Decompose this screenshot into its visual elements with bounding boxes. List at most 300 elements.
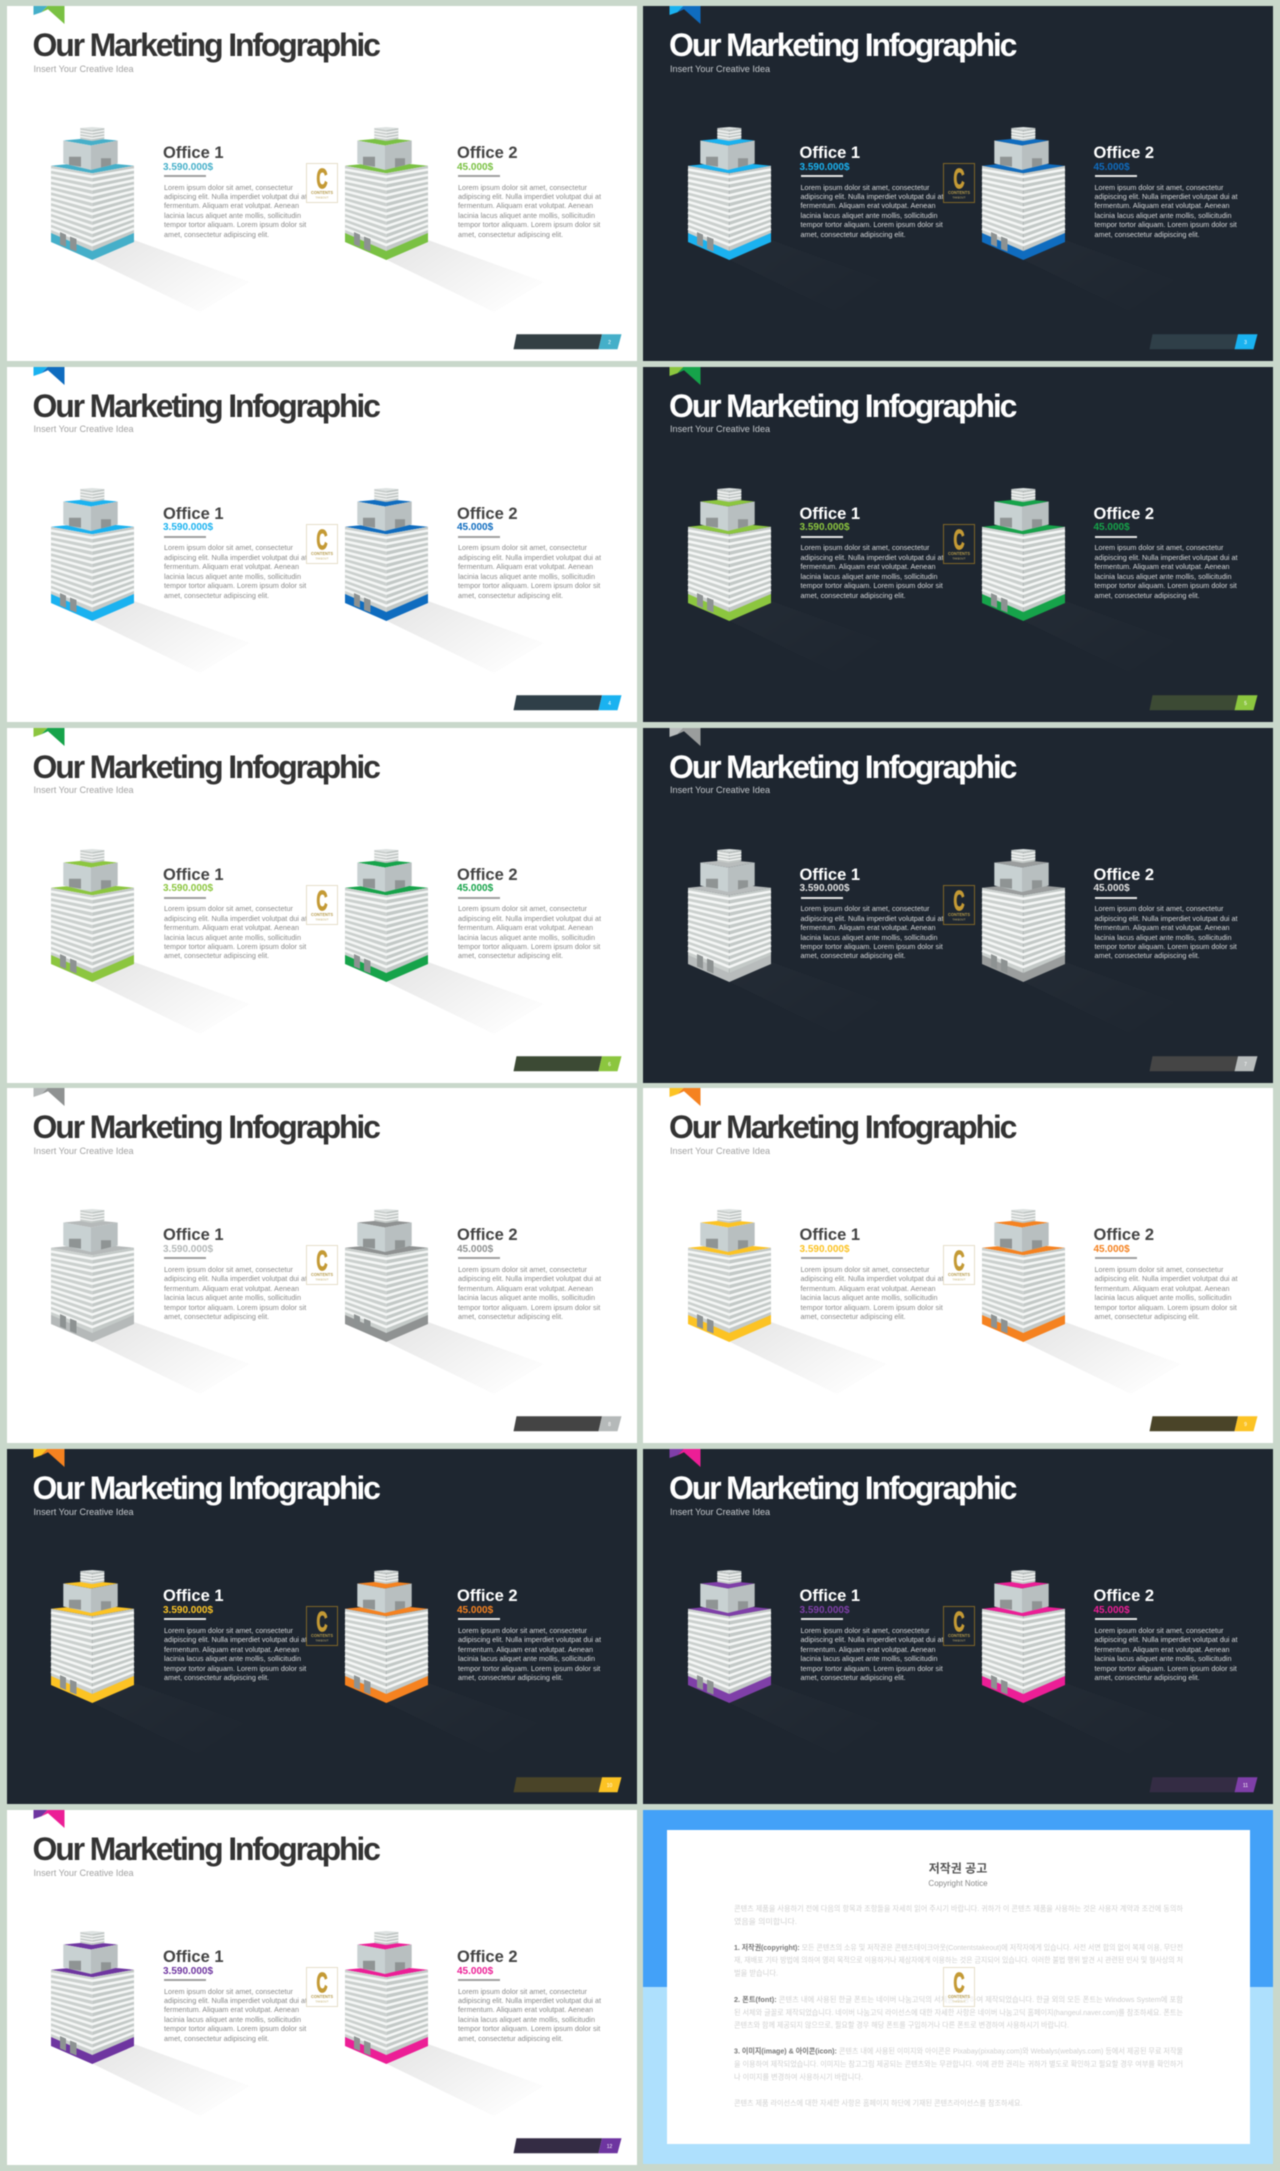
body text: fermentum. Aliquam erat volutpat. Aenean: [458, 923, 593, 932]
body text: tempor tortor aliquam. Lorem ipsum dolor sit: [800, 942, 943, 951]
icon: building office 1: [682, 1563, 776, 1708]
body text: adipiscing elit. Nulla imperdiet volutpat dui at: [1094, 914, 1238, 923]
body text: amet, consectetur adipiscing elit.: [458, 1312, 563, 1321]
text block: office 1: [800, 1226, 970, 1331]
body text: amet, consectetur adipiscing elit.: [1094, 951, 1200, 960]
body text: amet, consectetur adipiscing elit.: [800, 591, 906, 600]
section 3 image and icon: [734, 2046, 1183, 2082]
icon: building office 2: [344, 488, 506, 658]
body text: tempor tortor aliquam. Lorem ipsum dolor sit: [164, 1303, 306, 1312]
body text: fermentum. Aliquam erat volutpat. Aenean: [458, 562, 593, 571]
body text: tempor tortor aliquam. Lorem ipsum dolor sit: [1094, 581, 1237, 590]
body text: [1094, 904, 1238, 961]
body text: Lorem ipsum dolor sit amet, consectetur: [800, 543, 929, 552]
office value: 45.000$: [457, 1966, 493, 1976]
text block: office 2: [1094, 1587, 1264, 1692]
body text: [164, 536, 307, 600]
notice heading: 저작권 공고: [928, 1860, 987, 1876]
icon: building office 1: [50, 848, 212, 1019]
body text: lacinia lacus aliquet ante mollis, sollicitudin: [164, 1654, 301, 1663]
body text: adipiscing elit. Nulla imperdiet volutpat dui at: [1094, 1635, 1238, 1644]
panel: slide 3 sky and blue, dark: [643, 6, 1273, 361]
section 3 image and icon: 을 이용하여 제작되었습니다. 이미지는 참고그림 제공되는 콘텐츠와는 무관합니다. 이에 관한 권리는 귀하가 별도로 확인하고 필요할 경우 여부를 확인하거: [734, 2058, 1183, 2068]
page number bar: [510, 1775, 626, 1795]
body text: [1094, 174, 1238, 240]
office name: Office 1: [800, 866, 860, 884]
panel: copyright notice slide: [643, 1810, 1273, 2164]
icon: building office 2: [976, 1563, 1070, 1708]
body text: lacinia lacus aliquet ante mollis, sollicitudin: [800, 572, 938, 581]
title: Our Marketing Infographic: [32, 749, 379, 785]
text block: office 1: [163, 1226, 333, 1331]
body text: lacinia lacus aliquet ante mollis, sollicitudin: [164, 211, 301, 220]
icon: ribbon bookmark: [6, 1449, 76, 1473]
icon: contents logo badge: [306, 1967, 338, 2007]
text block: office 2: [457, 866, 627, 971]
office name: Office 2: [1094, 1226, 1154, 1244]
office name: Office 1: [800, 1587, 860, 1605]
title: Our Marketing Infographic: [669, 1109, 1015, 1145]
body text: [458, 1626, 601, 1682]
icon: building office 2: [981, 126, 1066, 260]
body text: Lorem ipsum dolor sit amet, consectetur: [1094, 543, 1223, 552]
page number bar: 3: [1244, 340, 1247, 346]
body text: [1094, 1626, 1238, 1682]
page number bar: 6: [608, 1062, 611, 1068]
office name: Office 1: [800, 505, 860, 523]
body text: lacinia lacus aliquet ante mollis, sollicitudin: [1094, 211, 1232, 220]
subtitle: Insert Your Creative Idea: [670, 785, 770, 795]
body text: fermentum. Aliquam erat volutpat. Aenean: [458, 201, 593, 210]
body text: amet, consectetur adipiscing elit.: [458, 230, 563, 239]
body text: Lorem ipsum dolor sit amet, consectetur: [164, 1265, 293, 1274]
office value: 3.590.000$: [800, 1605, 850, 1616]
icon: ribbon bookmark: [32, 366, 66, 386]
body text: amet, consectetur adipiscing elit.: [1094, 230, 1200, 239]
office name: Office 1: [163, 1226, 224, 1244]
intro paragraph: 였음을 의미합니다.: [734, 1916, 796, 1926]
body text: tempor tortor aliquam. Lorem ipsum dolor sit: [800, 1664, 943, 1673]
page number bar: [510, 2136, 626, 2156]
office value: 3.590.000$: [163, 1966, 213, 1976]
office value: 45.000$: [1094, 522, 1130, 533]
body text: fermentum. Aliquam erat volutpat. Aenean: [164, 562, 299, 571]
body text: amet, consectetur adipiscing elit.: [164, 230, 269, 239]
icon: building office 2: [344, 126, 506, 297]
body text: [164, 174, 307, 239]
text block: office 1: [162, 505, 307, 600]
icon: contents logo badge: [942, 162, 976, 204]
body text: adipiscing elit. Nulla imperdiet volutpat dui at: [1094, 192, 1238, 201]
body text: Lorem ipsum dolor sit amet, consectetur: [164, 904, 293, 913]
intro paragraph: [734, 1903, 1183, 1926]
body text: [458, 904, 601, 961]
body text: amet, consectetur adipiscing elit.: [164, 1673, 269, 1682]
text block: office 1: [162, 866, 307, 960]
body text: amet, consectetur adipiscing elit.: [800, 1312, 906, 1321]
body text: fermentum. Aliquam erat volutpat. Aenean: [1094, 1645, 1230, 1654]
body text: fermentum. Aliquam erat volutpat. Aenean: [458, 1284, 593, 1293]
office name: Office 2: [1094, 1587, 1154, 1605]
body text: [164, 1265, 307, 1322]
subtitle: Insert Your Creative Idea: [34, 1507, 134, 1517]
office value: 3.590.000$: [800, 883, 850, 894]
body text: adipiscing elit. Nulla imperdiet volutpat dui at: [458, 914, 601, 923]
office name: Office 2: [457, 1948, 518, 1966]
panel: slide 11 purple and pink, dark: [643, 1449, 1273, 1804]
body text: tempor tortor aliquam. Lorem ipsum dolor sit: [1094, 220, 1237, 229]
body text: Lorem ipsum dolor sit amet, consectetur: [164, 182, 293, 192]
body text: [800, 1626, 944, 1682]
body text: tempor tortor aliquam. Lorem ipsum dolor sit: [164, 942, 306, 951]
body text: lacinia lacus aliquet ante mollis, sollicitudin: [800, 1293, 938, 1302]
office name: Office 2: [457, 505, 518, 523]
body text: Lorem ipsum dolor sit amet, consectetur: [164, 543, 293, 552]
body text: fermentum. Aliquam erat volutpat. Aenean: [1094, 1284, 1230, 1293]
body text: fermentum. Aliquam erat volutpat. Aenean: [800, 201, 936, 210]
page number bar: [1147, 1775, 1262, 1795]
body text: Lorem ipsum dolor sit amet, consectetur: [800, 1265, 929, 1274]
icon: ribbon bookmark: [642, 1449, 712, 1473]
notice card: [666, 1830, 1250, 2144]
section 3 image and icon: 3. 이미지(image) & 아이콘(icon): 콘텐츠 내에 사용된 이미지와 아이콘은 Pixabay(pixabay.com)와 Webalys(webalys.com) 등에서 제공된 무료 저작물: [734, 2046, 1183, 2056]
body text: tempor tortor aliquam. Lorem ipsum dolor sit: [164, 1664, 306, 1673]
section 2 font: 콘텐츠와 함께 제공되지 않으므로, 필요할 경우 해당 폰트를 구입하거나 다른 폰트로 변경하여 사용하시기 바랍니다.: [734, 2020, 1068, 2030]
body text: [800, 174, 944, 240]
page number bar: [512, 694, 622, 712]
title: Our Marketing Infographic: [669, 1470, 1015, 1506]
body text: fermentum. Aliquam erat volutpat. Aenean: [800, 923, 936, 932]
icon: ribbon bookmark: [668, 366, 702, 386]
panel: slide 7 gray, dark: [643, 728, 1273, 1083]
page number bar: 8: [608, 1422, 611, 1428]
office name: Office 1: [163, 1948, 224, 1966]
title: Our Marketing Infographic: [669, 388, 1015, 424]
body text: amet, consectetur adipiscing elit.: [1094, 1673, 1200, 1682]
text block: office 2: [456, 144, 602, 239]
body text: fermentum. Aliquam erat volutpat. Aenean: [800, 1645, 936, 1654]
body text: tempor tortor aliquam. Lorem ipsum dolor sit: [164, 2024, 306, 2033]
icon: contents logo badge: [306, 1245, 338, 1285]
body text: lacinia lacus aliquet ante mollis, sollicitudin: [164, 1293, 301, 1302]
subtitle: Insert Your Creative Idea: [34, 785, 134, 795]
body text: [800, 1265, 944, 1322]
subtitle: Insert Your Creative Idea: [670, 1146, 770, 1156]
text block: office 1: [163, 1587, 333, 1692]
page number bar: 10: [606, 1783, 612, 1789]
page number bar: [510, 1414, 626, 1434]
section 3 image and icon: 나 이미지를 변경하여 사용하시기 바랍니다.: [734, 2072, 862, 2082]
text block: office 1: [799, 505, 944, 600]
body text: Lorem ipsum dolor sit amet, consectetur: [800, 182, 929, 192]
office name: Office 2: [457, 866, 518, 884]
body text: adipiscing elit. Nulla imperdiet volutpat dui at: [164, 914, 307, 923]
body text: tempor tortor aliquam. Lorem ipsum dolor sit: [458, 220, 600, 229]
subtitle: Insert Your Creative Idea: [34, 1868, 134, 1878]
body text: tempor tortor aliquam. Lorem ipsum dolor sit: [458, 1303, 600, 1312]
panel: slide 10 yellow and orange, dark: [6, 1449, 636, 1804]
page number bar: 11: [1243, 1783, 1248, 1789]
body text: [164, 1986, 307, 2043]
icon: building office 2: [981, 487, 1066, 622]
body text: amet, consectetur adipiscing elit.: [164, 591, 269, 600]
office name: Office 1: [163, 1587, 224, 1605]
body text: fermentum. Aliquam erat volutpat. Aenean: [458, 1645, 593, 1654]
body text: Lorem ipsum dolor sit amet, consectetur: [458, 1986, 587, 1996]
body text: [164, 1626, 307, 1682]
body text: adipiscing elit. Nulla imperdiet volutpat dui at: [458, 192, 601, 201]
body text: amet, consectetur adipiscing elit.: [800, 1673, 906, 1682]
text block: office 2: [1094, 866, 1264, 971]
body text: amet, consectetur adipiscing elit.: [458, 951, 563, 960]
subtitle: Insert Your Creative Idea: [670, 1507, 770, 1517]
icon: ribbon bookmark: [32, 727, 66, 746]
body text: adipiscing elit. Nulla imperdiet volutpat dui at: [800, 1635, 944, 1644]
icon: contents logo badge: [306, 885, 338, 925]
body text: tempor tortor aliquam. Lorem ipsum dolor sit: [800, 1303, 943, 1312]
office value: 3.590.000$: [800, 522, 850, 533]
body text: fermentum. Aliquam erat volutpat. Aenean: [1094, 562, 1230, 571]
office value: 45.000$: [457, 1605, 493, 1616]
icon: building office 1: [45, 1202, 140, 1347]
office value: 45.000$: [457, 883, 493, 894]
icon: ribbon bookmark: [6, 1810, 76, 1834]
title: Our Marketing Infographic: [32, 1109, 379, 1145]
icon: contents logo badge: [942, 1606, 974, 1646]
icon: building office 1: [682, 842, 776, 987]
body text: lacinia lacus aliquet ante mollis, sollicitudin: [800, 932, 938, 942]
office value: 3.590.000$: [163, 162, 213, 172]
office value: 3.590.000$: [163, 522, 213, 533]
body text: [458, 536, 602, 600]
body text: Lorem ipsum dolor sit amet, consectetur: [458, 904, 587, 913]
office name: Office 2: [1094, 144, 1154, 162]
page number bar: [512, 333, 622, 350]
section 2 font: 된 서체와 글꼴로 제작되었습니다. 네이버 나눔고딕 라이선스에 대한 자세한 사항은 네이버 나눔고딕 홈페이지(hangeul.naver.com)를 참조하세요. 폰트는: [734, 2007, 1183, 2017]
section 1 copyright: 재, 재배포 기타 방법에 의하여 영리 목적으로 이용하거나 제삼자에게 이용하는 것은 금지되어 있습니다. 이러한 불법 행위 발견 시 관련된 민사 및 형사상의 처: [734, 1954, 1183, 1964]
page number bar: 12: [606, 2144, 612, 2150]
body text: lacinia lacus aliquet ante mollis, sollicitudin: [1094, 572, 1232, 581]
office value: 45.000$: [457, 522, 493, 533]
body text: lacinia lacus aliquet ante mollis, sollicitudin: [458, 1654, 595, 1663]
body text: amet, consectetur adipiscing elit.: [164, 1312, 269, 1321]
office name: Office 1: [800, 1226, 860, 1244]
body text: lacinia lacus aliquet ante mollis, sollicitudin: [1094, 932, 1232, 942]
body text: fermentum. Aliquam erat volutpat. Aenean: [1094, 201, 1230, 210]
title: Our Marketing Infographic: [32, 1831, 379, 1867]
icon: building office 1: [45, 1924, 140, 2069]
body text: Lorem ipsum dolor sit amet, consectetur: [800, 904, 929, 913]
office value: 3.590.000$: [163, 1244, 213, 1255]
body text: tempor tortor aliquam. Lorem ipsum dolor sit: [1094, 1303, 1237, 1312]
icon: building office 1: [682, 1202, 776, 1347]
body text: amet, consectetur adipiscing elit.: [458, 591, 563, 600]
blue top band: [643, 1810, 1273, 1987]
body text: lacinia lacus aliquet ante mollis, sollicitudin: [458, 211, 595, 220]
icon: building office 2: [339, 1563, 434, 1708]
page number bar: [1150, 334, 1258, 350]
subtitle: Insert Your Creative Idea: [34, 424, 134, 434]
body text: fermentum. Aliquam erat volutpat. Aenean: [164, 201, 299, 210]
body text: tempor tortor aliquam. Lorem ipsum dolor sit: [800, 581, 943, 590]
body text: lacinia lacus aliquet ante mollis, sollicitudin: [800, 1654, 938, 1663]
body text: adipiscing elit. Nulla imperdiet volutpat dui at: [164, 1635, 307, 1644]
text block: office 2: [1094, 1226, 1264, 1331]
body text: adipiscing elit. Nulla imperdiet volutpat dui at: [458, 1996, 601, 2005]
subtitle: Insert Your Creative Idea: [34, 1146, 134, 1156]
text block: office 2: [456, 505, 602, 600]
body text: adipiscing elit. Nulla imperdiet volutpat dui at: [164, 1996, 307, 2005]
body text: amet, consectetur adipiscing elit.: [1094, 1312, 1200, 1321]
office name: Office 1: [163, 866, 224, 884]
icon: contents logo badge: [942, 1967, 974, 2007]
text block: office 2: [457, 1948, 627, 2053]
icon: contents logo badge: [306, 1606, 338, 1646]
body text: Lorem ipsum dolor sit amet, consectetur: [1094, 904, 1223, 913]
panel: slide 9 yellow and orange, light: [643, 1088, 1273, 1443]
office value: 45.000$: [457, 1244, 493, 1255]
page number bar: 2: [608, 340, 611, 346]
body text: fermentum. Aliquam erat volutpat. Aenean: [800, 1284, 936, 1293]
section 1 copyright: 벌을 받습니다.: [734, 1968, 778, 1978]
body text: amet, consectetur adipiscing elit.: [800, 951, 906, 960]
body text: adipiscing elit. Nulla imperdiet volutpat dui at: [458, 1274, 601, 1283]
text block: office 2: [1093, 144, 1238, 240]
text block: office 2: [1093, 505, 1238, 600]
body text: fermentum. Aliquam erat volutpat. Aenean: [1094, 923, 1230, 932]
subtitle: Insert Your Creative Idea: [670, 64, 770, 74]
text block: office 2: [457, 1587, 627, 1692]
office value: 45.000$: [1094, 1244, 1130, 1255]
page number bar: [1147, 1054, 1262, 1074]
body text: [1094, 1265, 1238, 1322]
title: Our Marketing Infographic: [669, 749, 1015, 785]
icon: building office 2: [339, 1202, 434, 1347]
body text: lacinia lacus aliquet ante mollis, sollicitudin: [1094, 1293, 1232, 1302]
body text: lacinia lacus aliquet ante mollis, sollicitudin: [1094, 1654, 1232, 1663]
panel: slide 8 gray, light: [6, 1088, 636, 1443]
office name: Office 2: [457, 1587, 518, 1605]
icon: contents logo badge: [306, 162, 338, 204]
body text: Lorem ipsum dolor sit amet, consectetur: [458, 1626, 587, 1635]
body text: amet, consectetur adipiscing elit.: [800, 230, 906, 239]
body text: lacinia lacus aliquet ante mollis, sollicitudin: [458, 932, 595, 942]
body text: Lorem ipsum dolor sit amet, consectetur: [1094, 1626, 1223, 1635]
body text: fermentum. Aliquam erat volutpat. Aenean: [800, 562, 936, 571]
body text: lacinia lacus aliquet ante mollis, sollicitudin: [458, 1293, 595, 1302]
text block: office 1: [800, 1587, 970, 1692]
office name: Office 2: [457, 144, 518, 162]
body text: Lorem ipsum dolor sit amet, consectetur: [1094, 1265, 1223, 1274]
office value: 3.590.000$: [800, 1244, 850, 1255]
body text: adipiscing elit. Nulla imperdiet volutpat dui at: [164, 1274, 307, 1283]
body text: [458, 1986, 601, 2043]
icon: ribbon bookmark: [32, 5, 66, 24]
panel: slide 4 sky and blue, light: [6, 367, 636, 722]
body text: Lorem ipsum dolor sit amet, consectetur: [164, 1626, 293, 1635]
body text: adipiscing elit. Nulla imperdiet volutpat dui at: [458, 553, 601, 562]
body text: lacinia lacus aliquet ante mollis, sollicitudin: [458, 572, 595, 581]
office name: Office 2: [1094, 866, 1154, 884]
body text: Lorem ipsum dolor sit amet, consectetur: [458, 1265, 587, 1274]
body text: [458, 174, 602, 239]
panel: slide 2 teal and green, light: [6, 6, 636, 361]
office name: Office 1: [163, 144, 224, 162]
body text: tempor tortor aliquam. Lorem ipsum dolor sit: [800, 220, 943, 229]
body text: lacinia lacus aliquet ante mollis, sollicitudin: [164, 572, 301, 581]
icon: building office 1: [50, 126, 212, 297]
office value: 3.590.000$: [800, 162, 850, 172]
icon: building office 2: [976, 1202, 1070, 1347]
body text: fermentum. Aliquam erat volutpat. Aenean: [164, 923, 299, 932]
intro paragraph: 콘텐츠 제품을 사용하기 전에 다음의 항목과 조항들을 자세히 읽어 주시기 바랍니다. 귀하가 이 콘텐츠 제품을 사용하는 것은 사용자 계약과 조건에 동의하: [734, 1903, 1183, 1913]
section 1 copyright: [734, 1942, 1183, 1978]
office name: Office 1: [163, 505, 224, 523]
text block: office 1: [162, 144, 307, 239]
page number bar: 7: [1244, 1062, 1247, 1068]
body text: lacinia lacus aliquet ante mollis, sollicitudin: [458, 2015, 595, 2024]
body text: amet, consectetur adipiscing elit.: [458, 2034, 563, 2043]
body text: amet, consectetur adipiscing elit.: [164, 2034, 269, 2043]
section 1 copyright: 1. 저작권(copyright): 모든 콘텐츠의 소유 및 저작권은 콘텐츠테이크아웃(Contentstakeout)에 저작자에게 있습니다. 사전 서면 합의 없이 복제 이용, 무단전: [734, 1942, 1183, 1952]
body text: [458, 1265, 601, 1322]
body text: adipiscing elit. Nulla imperdiet volutpat dui at: [164, 192, 307, 201]
body text: Lorem ipsum dolor sit amet, consectetur: [458, 543, 587, 552]
icon: building office 1: [45, 1563, 140, 1708]
body text: fermentum. Aliquam erat volutpat. Aenean: [164, 2005, 299, 2014]
closing line: 콘텐츠 제품 라이선스에 대한 자세한 사항은 홈페이지 하단에 기재된 콘텐츠라이선스를 참조하세요.: [734, 2098, 1022, 2108]
office value: 45.000$: [457, 162, 493, 172]
body text: amet, consectetur adipiscing elit.: [164, 951, 269, 960]
body text: adipiscing elit. Nulla imperdiet volutpat dui at: [800, 1274, 944, 1283]
office value: 45.000$: [1094, 162, 1130, 172]
body text: adipiscing elit. Nulla imperdiet volutpat dui at: [1094, 553, 1238, 562]
office name: Office 1: [800, 144, 860, 162]
office value: 45.000$: [1094, 883, 1130, 894]
body text: fermentum. Aliquam erat volutpat. Aenean: [458, 2005, 593, 2014]
body text: lacinia lacus aliquet ante mollis, sollicitudin: [800, 211, 938, 220]
body text: fermentum. Aliquam erat volutpat. Aenean: [164, 1645, 299, 1654]
page number bar: [1147, 1414, 1262, 1434]
icon: contents logo badge: [306, 524, 338, 564]
subtitle: Insert Your Creative Idea: [670, 424, 770, 434]
text block: office 1: [163, 1948, 333, 2053]
body text: adipiscing elit. Nulla imperdiet volutpat dui at: [458, 1635, 601, 1644]
title: Our Marketing Infographic: [669, 27, 1015, 63]
title: Our Marketing Infographic: [32, 1470, 379, 1506]
text block: office 1: [800, 866, 970, 971]
body text: Lorem ipsum dolor sit amet, consectetur: [1094, 182, 1223, 192]
page number bar: [1150, 694, 1258, 711]
icon: building office 2: [976, 842, 1070, 987]
text block: office 1: [799, 144, 944, 240]
page number bar: 9: [1244, 1422, 1247, 1428]
office value: 45.000$: [1094, 1605, 1130, 1616]
icon: building office 2: [339, 842, 434, 987]
icon: building office 1: [50, 488, 212, 658]
panel: slide 5 greens, dark: [643, 367, 1273, 722]
body text: adipiscing elit. Nulla imperdiet volutpat dui at: [800, 192, 944, 201]
icon: ribbon bookmark: [642, 1088, 712, 1112]
body text: tempor tortor aliquam. Lorem ipsum dolor sit: [164, 220, 306, 229]
body text: fermentum. Aliquam erat volutpat. Aenean: [164, 1284, 299, 1293]
body text: tempor tortor aliquam. Lorem ipsum dolor sit: [1094, 1664, 1237, 1673]
body text: adipiscing elit. Nulla imperdiet volutpat dui at: [164, 553, 307, 562]
office name: Office 2: [457, 1226, 518, 1244]
icon: building office 2: [339, 1924, 434, 2069]
title: Our Marketing Infographic: [32, 388, 379, 424]
section 2 font: [734, 1994, 1183, 2030]
